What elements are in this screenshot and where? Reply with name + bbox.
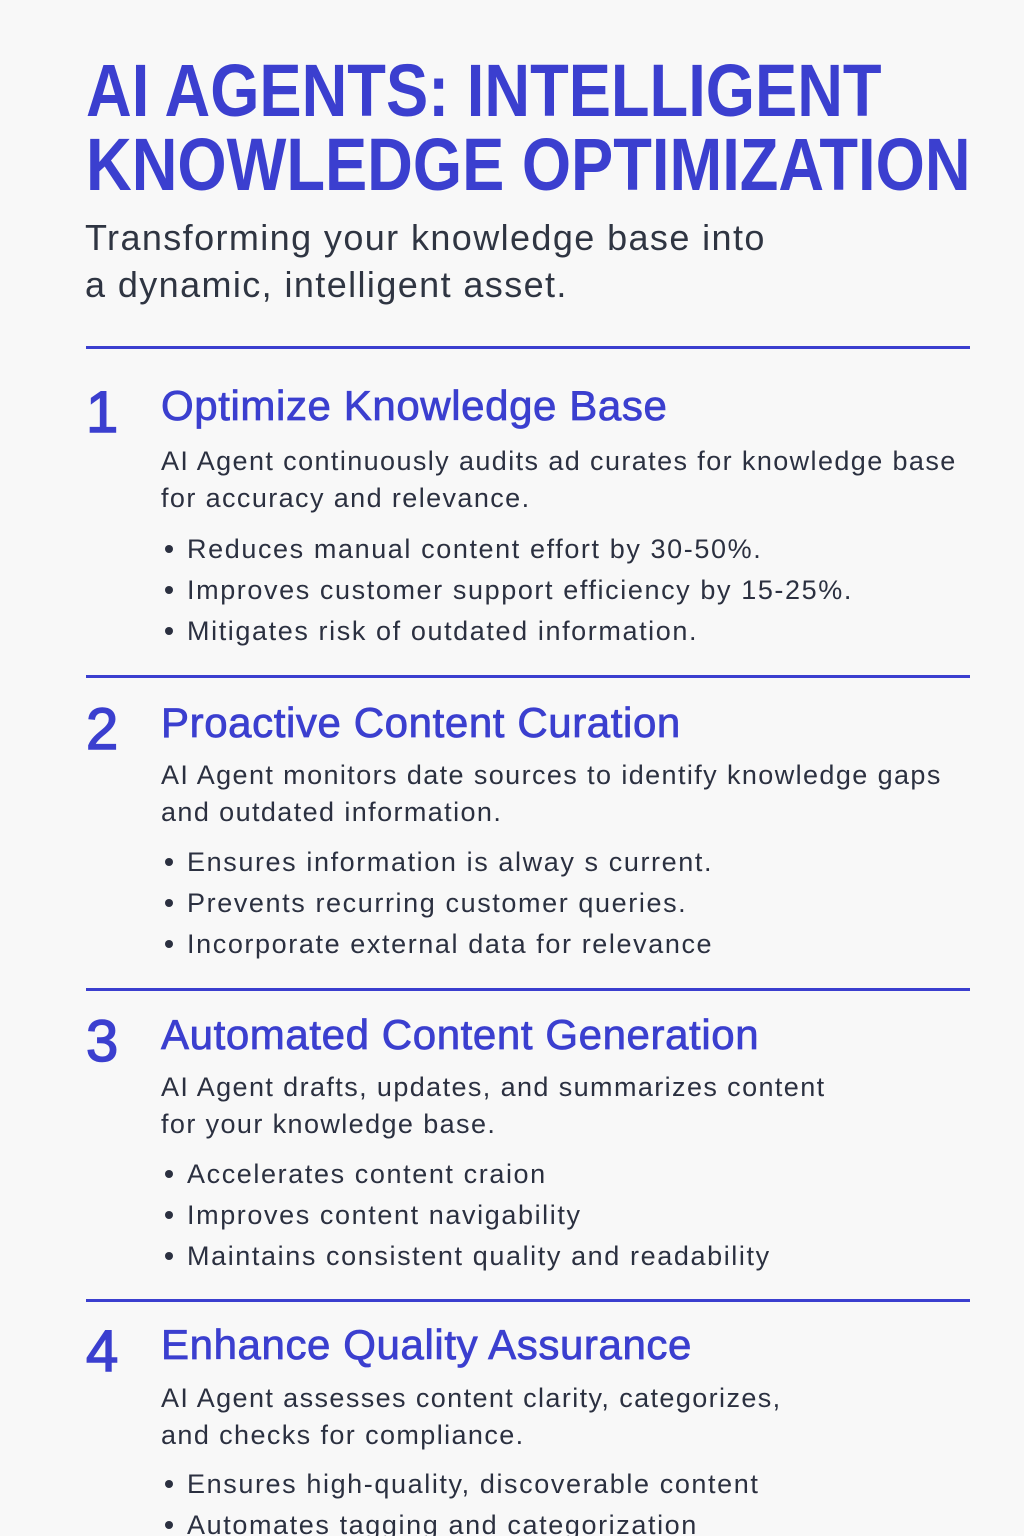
heading 1: Optimize Knowledge Base [161,382,667,429]
heading 2: Proactive Content Curation [161,699,681,746]
bullets 2: Ensures information is alway s current. [187,847,713,877]
bullets 4 [165,1469,760,1536]
body 2 [161,760,942,827]
body 1 [161,446,957,513]
body 2: AI Agent monitors date sources to identify knowledge gaps [161,760,942,790]
subtitle [85,217,766,305]
body 3: for your knowledge base. [161,1109,496,1139]
title: AI AGENTS: INTELLIGENT [86,49,882,132]
body 4 [161,1383,782,1450]
subtitle: a dynamic, intelligent asset. [85,264,568,305]
body 4: and checks for compliance. [161,1420,525,1450]
bullets 3 [165,1159,771,1271]
section 1 [86,380,957,646]
bullets 4: Ensures high-quality, discoverable content [187,1469,760,1499]
bullets 3: Maintains consistent quality and readability [187,1241,771,1271]
body 1: AI Agent continuously audits ad curates for knowledge base [161,446,957,476]
bullets 2: Prevents recurring customer queries. [187,888,687,918]
body 2: and outdated information. [161,797,502,827]
bullets 1 [165,534,853,646]
title: KNOWLEDGE OPTIMIZATION [86,123,971,206]
heading 3: Automated Content Generation [161,1011,759,1058]
section 2 [86,697,942,959]
body 3: AI Agent drafts, updates, and summarizes content [161,1072,826,1102]
subtitle: Transforming your knowledge base into [85,217,766,258]
body 3 [161,1072,826,1139]
number 4: 4 [86,1319,118,1384]
bullets 2: Incorporate external data for relevance [187,929,713,959]
bullets 1: Mitigates risk of outdated information. [187,616,698,646]
heading 4: Enhance Quality Assurance [161,1321,692,1368]
bullets 1: Improves customer support efficiency by 15-25%. [187,575,853,605]
bullets 1: Reduces manual content effort by 30-50%. [187,534,762,564]
bullets 3: Improves content navigability [187,1200,582,1230]
bullets 3: Accelerates content craion [187,1159,547,1189]
number 2: 2 [86,697,118,762]
section 4 [86,1319,782,1536]
title [86,49,971,206]
body 1: for accuracy and relevance. [161,483,530,513]
body 4: AI Agent assesses content clarity, categorizes, [161,1383,782,1413]
number 1: 1 [86,380,118,445]
number 3: 3 [86,1009,118,1074]
section 3 [86,1009,826,1271]
bullets 2 [165,847,713,959]
